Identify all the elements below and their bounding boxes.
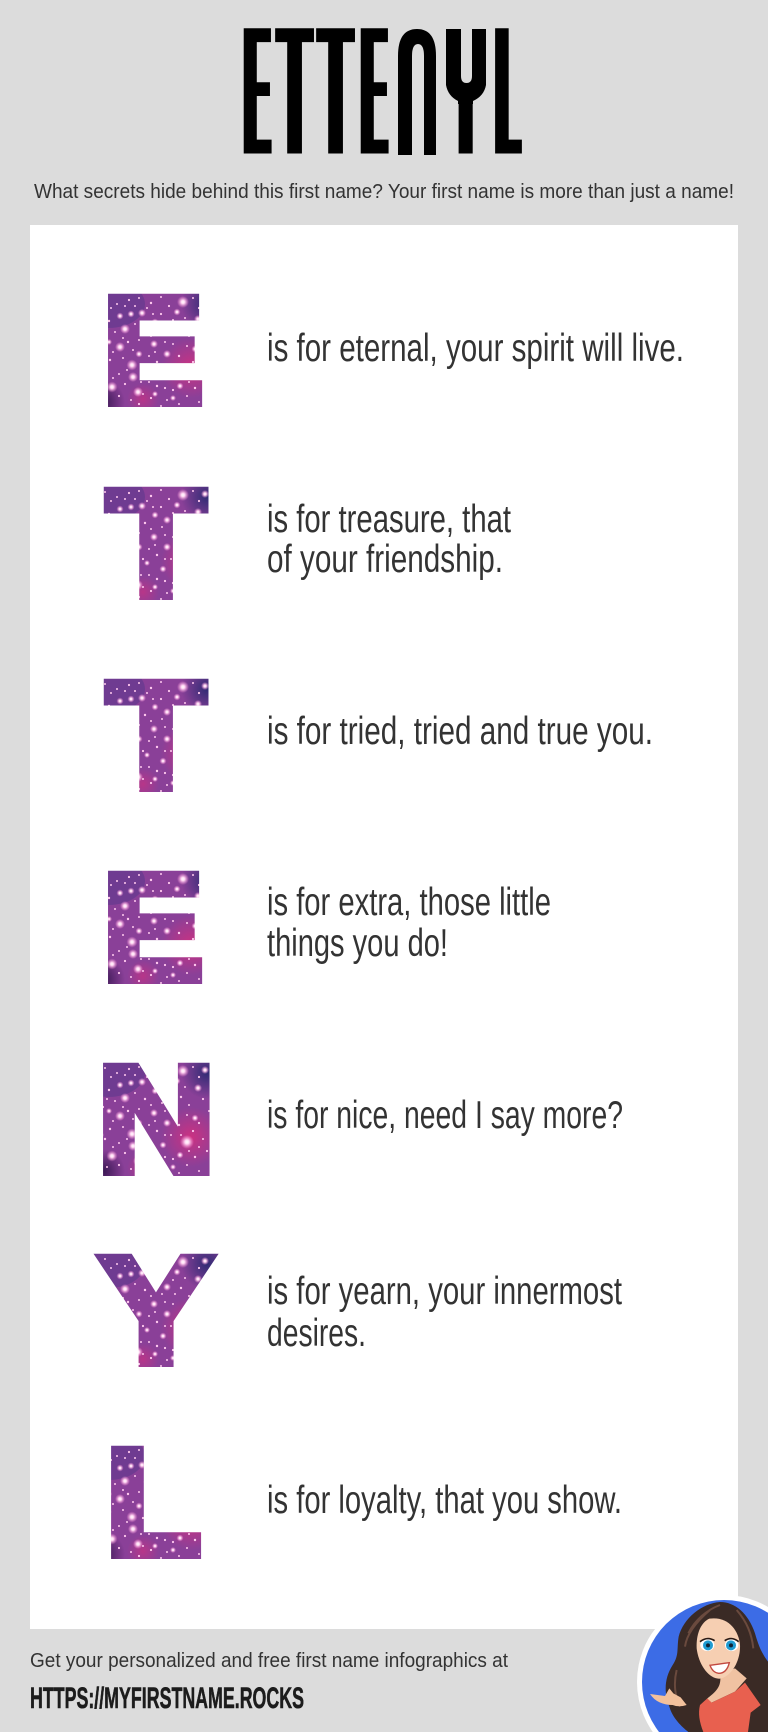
face <box>697 1618 740 1679</box>
text: treasure: of your friendship. <box>267 538 503 581</box>
text: yearn: desires. <box>267 1312 366 1355</box>
text: treasure: is for treasure, that <box>267 498 511 541</box>
subtitle: What secrets hide behind this first name? Your first name is more than just a name! <box>34 180 734 203</box>
letter E: E <box>103 843 203 1011</box>
row: N nice <box>98 1035 623 1203</box>
hair <box>666 1602 768 1732</box>
row: T treasure <box>107 459 511 627</box>
text: extra <box>267 881 551 965</box>
title letter shaping <box>396 27 488 157</box>
letter T: T <box>107 651 205 819</box>
shirt <box>699 1683 761 1732</box>
row: Y yearn <box>100 1226 622 1394</box>
letter T: T <box>107 459 205 627</box>
text: extra: is for extra, those little <box>267 881 551 924</box>
letter N: N <box>98 1035 215 1203</box>
row: L loyalty <box>106 1418 622 1586</box>
letter Y: Y <box>100 1226 212 1394</box>
text: nice: is for nice, need I say more? <box>267 1094 623 1137</box>
text: treasure <box>267 498 511 581</box>
row: T tried <box>107 651 653 819</box>
row: E eternal <box>103 266 684 434</box>
footer text: Get your personalized and free first name infographics at <box>30 1650 508 1672</box>
hand <box>650 1688 687 1706</box>
text: yearn <box>267 1270 622 1355</box>
text: extra: things you do! <box>267 922 448 965</box>
title <box>244 0 522 194</box>
icon: avatar <box>637 1595 768 1732</box>
text: tried: is for tried, tried and true you. <box>267 710 653 753</box>
letter L: L <box>106 1418 201 1586</box>
eyes <box>700 1639 714 1651</box>
neck <box>707 1668 747 1703</box>
text: loyalty: is for loyalty, that you show. <box>267 1479 622 1522</box>
footer url: HTTPS://MYFIRSTNAME.ROCKS <box>30 1682 304 1715</box>
panel: letters <box>30 225 738 1629</box>
row: E extra <box>103 843 551 1011</box>
mouth <box>710 1663 729 1673</box>
text: yearn: is for yearn, your innermost <box>267 1270 622 1313</box>
letter E: E <box>103 266 203 434</box>
